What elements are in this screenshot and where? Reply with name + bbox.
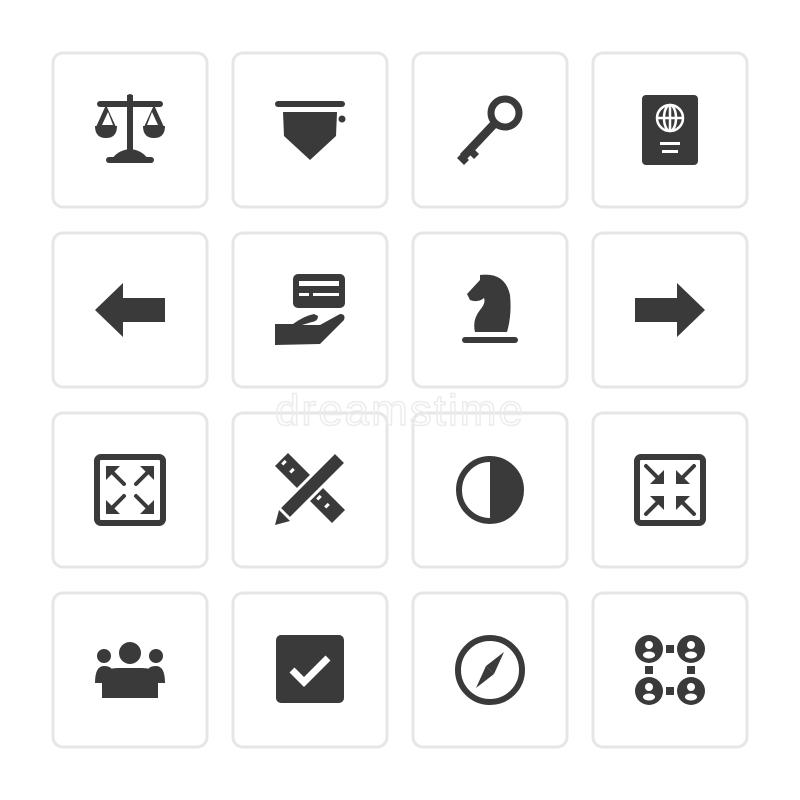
watermark: dreamstime xyxy=(275,386,525,435)
icon: passport xyxy=(642,95,698,165)
icon: left arrow xyxy=(95,283,165,337)
icon: checkbox xyxy=(276,635,344,703)
icon: group xyxy=(95,642,165,698)
icon: expand xyxy=(97,457,163,523)
icon: chess knight xyxy=(462,275,518,343)
icon: scales xyxy=(95,94,165,163)
icon: key xyxy=(457,99,519,165)
icon: pencil and ruler xyxy=(275,452,346,525)
icon: contrast xyxy=(459,459,521,521)
icon: hand with card xyxy=(275,274,345,345)
icon: people network xyxy=(635,635,705,705)
icon: compress xyxy=(637,457,703,523)
icon: right arrow xyxy=(635,283,705,337)
icon: graduation cap xyxy=(275,101,346,160)
icon: compass xyxy=(458,638,522,702)
